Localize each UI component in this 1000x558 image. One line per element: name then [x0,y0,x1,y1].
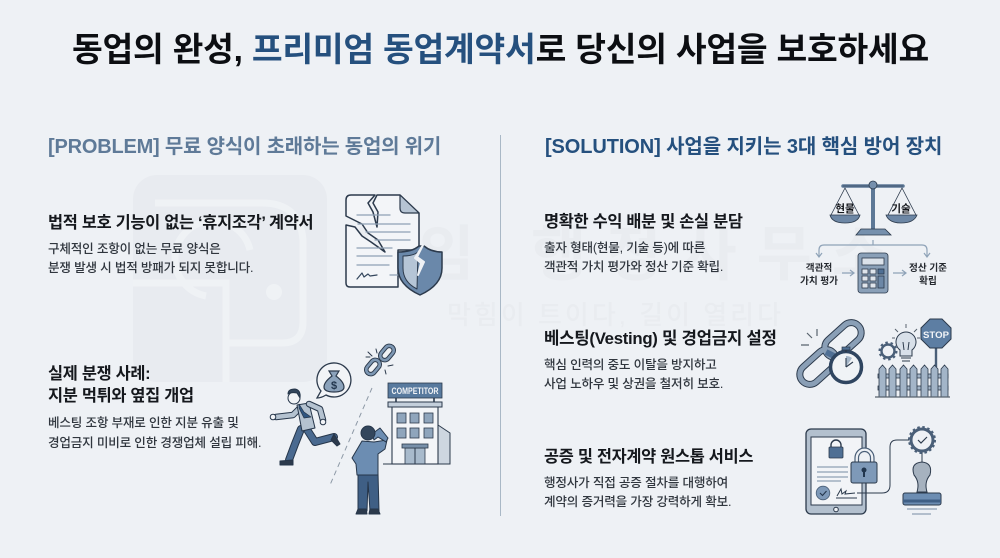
label: cash: 현물 [835,202,855,215]
solution 3 text: 행정사가 직접 공증 절차를 대행하여 [544,476,728,490]
divider [500,135,501,516]
solution 3 text [544,476,731,509]
icon: connector line [857,440,922,493]
label: objective valuation: 가치 평가 [800,275,838,287]
icon: competitor building [383,383,450,464]
panel: solution [544,136,942,509]
title: 동업의 완성, 프리미엄 동업계약서로 당신의 사업을 보호하세요 [72,32,929,69]
icon: gear, light bulb, stop sign, fence: STOP [923,330,950,341]
problem 2 text: 경업금지 미비로 인한 경쟁업체 설립 피해. [48,436,261,450]
icon: calculator [858,253,888,293]
label: technology: 기술 [891,202,911,215]
icon: broken chain [364,344,396,376]
problem 1 text: 분쟁 발생 시 법적 방패가 되지 못합니다. [48,261,253,275]
solution 1 text: 객관적 가치 평가와 정산 기준 확립. [544,260,723,274]
icon: balance scale [830,181,917,235]
solution 2 text: 사업 노하우 및 상권을 철저히 보호. [544,377,723,391]
icon: gear, light bulb, stop sign, fence [875,319,951,397]
icon: running partner [270,389,340,465]
icon: competitor building: COMPETITOR [392,386,439,397]
watermark text: 신임 행정사무소 [344,221,907,288]
icon: worried person [352,426,388,514]
solution 1 text: 출자 형태(현물, 기술 등)에 따른 [544,241,705,255]
icon: money bag speech bubble: $ [331,380,337,392]
problem 2 heading: 지분 먹튀와 옆집 개업 [48,387,194,405]
solution heading: [SOLUTION] 사업을 지키는 3대 핵심 방어 장치 [545,136,942,158]
problem 2 heading: 실제 분쟁 사례: [48,365,150,383]
icon: torn contract and broken shield [346,195,442,295]
icon: chain and stopwatch [796,319,865,388]
problem 1 text: 구체적인 조항이 없는 무료 양식은 [48,242,221,256]
watermark slogan: 막힘이 트이다, 길이 열리다 [447,300,784,330]
label: objective valuation: 객관적 [806,262,832,274]
problem 2 text [48,416,261,450]
solution 2 text [544,358,723,391]
icon: tablet e-contract with lock [806,429,877,514]
dashed diagonal line [330,388,372,485]
icon: money bag speech bubble [317,363,351,398]
solution 1 text [544,241,723,274]
solution 3 text: 계약의 증거력을 가장 강력하게 확보. [544,495,731,509]
panel: problem [48,136,441,450]
icon: approval seal and stamp [903,427,941,514]
problem 1 text [48,242,253,275]
label: settlement: 확립 [919,275,937,287]
solution 2 heading: 베스팅(Vesting) 및 경업금지 설정 [544,329,777,348]
problem heading: [PROBLEM] 무료 양식이 초래하는 동업의 위기 [48,136,441,158]
problem 2 heading [48,365,194,405]
scale branch arrows [816,240,930,276]
solution 2 text: 핵심 인력의 중도 이탈을 방지하고 [544,358,717,372]
problem 1 heading: 법적 보호 기능이 없는 ‘휴지조각’ 계약서 [48,214,313,232]
solution 1 heading: 명확한 수익 배분 및 손실 분담 [544,213,743,231]
label: settlement: 정산 기준 [909,262,947,274]
problem 2 text: 베스팅 조항 부재로 인한 지분 유출 및 [48,416,239,430]
solution 3 heading: 공증 및 전자계약 원스톱 서비스 [544,448,753,466]
